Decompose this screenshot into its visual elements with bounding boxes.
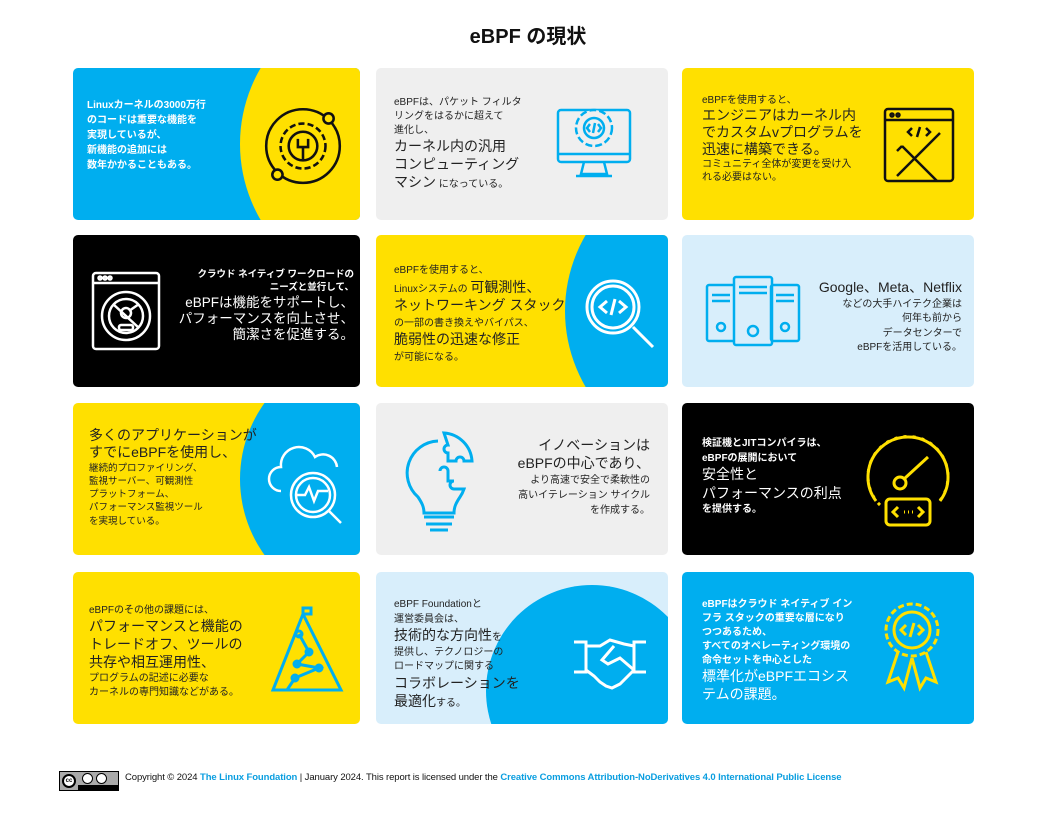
text: linux kernel: 数年かかることもある。 — [87, 160, 197, 171]
icon: award ribbon — [884, 602, 940, 692]
text: challenges: 共存や相互運用性、 — [89, 654, 215, 670]
panel: foundation — [376, 572, 668, 724]
panel: verifier JIT — [682, 403, 974, 555]
icon: gear wrench — [264, 108, 342, 184]
text: challenges: トレードオフ、ツールの — [89, 636, 242, 652]
text: general computing: eBPFは、パケット フィルタ — [394, 97, 522, 108]
text: innovation: イノベーションは — [538, 437, 650, 453]
text: observability: Linuxシステムの 可観測性、 — [394, 278, 540, 294]
text: cloud native: パフォーマンスを向上させ、 — [179, 311, 354, 326]
text: applications: すでにeBPFを使用し、 — [89, 444, 236, 460]
text: linux kernel: 実現しているが、 — [87, 130, 166, 141]
panel: applications — [73, 403, 360, 555]
text: big tech: データセンターで — [883, 328, 962, 338]
text: observability: eBPFを使用すると、 — [394, 265, 489, 276]
text: foundation: 技術的な方向性を — [394, 627, 502, 643]
text: observability: の一部の書き換えやバイパス、 — [394, 318, 534, 328]
text: general computing — [394, 96, 522, 190]
panel: cloud native — [73, 235, 360, 387]
icon: cc badge — [59, 771, 119, 791]
text: observability: 脆弱性の迅速な修正 — [394, 331, 520, 347]
text: applications: 継続的プロファイリング、 — [89, 463, 202, 474]
text: custom programs: エンジニアはカーネル内 — [702, 107, 856, 123]
panel: custom programs — [682, 68, 974, 220]
text: standardization: eBPFはクラウド ネイティブ イン — [702, 599, 852, 610]
text: standardization: つつあるため、 — [702, 627, 772, 638]
text: applications — [89, 427, 257, 527]
text: applications: 監視サーバー、可観測性 — [89, 476, 193, 487]
text: innovation: 高いイテレーション サイクル — [518, 490, 650, 501]
text: standardization — [702, 598, 852, 702]
text: cloud native: 簡潔さを促進する。 — [232, 327, 354, 342]
text: general computing: コンピューティング — [394, 156, 519, 172]
text: foundation: 最適化する。 — [394, 693, 466, 709]
text: general computing: 進化し、 — [394, 125, 434, 136]
text: cloud native: ニーズと並行して、 — [270, 282, 354, 293]
text: challenges: eBPFのその他の課題には、 — [89, 605, 214, 616]
text: custom programs: でカスタムvプログラムを — [702, 124, 863, 140]
text: custom programs: 迅速に構築できる。 — [702, 141, 828, 157]
text: applications: プラットフォーム、 — [89, 489, 174, 500]
text: observability: が可能になる。 — [394, 352, 464, 362]
text: foundation: コラボレーションを — [394, 674, 520, 690]
text: standardization: フラ スタックの重要な層になり — [702, 613, 845, 624]
text: challenges: パフォーマンスと機能の — [89, 618, 243, 634]
text: applications: を実現している。 — [89, 516, 165, 527]
text: linux kernel: のコードは重要な機能を — [87, 115, 197, 126]
icon: cloud magnifier — [268, 446, 342, 524]
text: big tech: などの大手ハイテク企業は — [842, 298, 962, 310]
text: foundation: ロードマップに関する — [394, 661, 494, 672]
text: verifier JIT: eBPFの展開において — [702, 452, 797, 464]
text: verifier JIT: パフォーマンスの利点 — [702, 484, 842, 500]
panel: big tech — [682, 235, 974, 387]
text: innovation: eBPFの中心であり、 — [518, 455, 650, 471]
text: general computing: カーネル内の汎用 — [394, 138, 506, 154]
text: standardization: 標準化がeBPFエコシス — [702, 668, 849, 684]
text: custom programs: コミュニティ全体が変更を受け入 — [702, 159, 851, 170]
text: big tech: Google、Meta、Netflix — [819, 279, 962, 295]
text: challenges: プログラムの記述に必要な — [89, 673, 209, 684]
text: custom programs: れる必要はない。 — [702, 172, 782, 183]
text: standardization: すべてのオペレーティング環境の — [702, 641, 850, 652]
text: verifier JIT: を提供する。 — [702, 504, 762, 515]
text: foundation: 提供し、テクノロジーの — [394, 646, 503, 658]
text: linux kernel: Linuxカーネルの3000万行 — [87, 100, 206, 111]
icon: servers — [706, 276, 800, 346]
icon: handshake — [574, 638, 646, 690]
icon: cc badge: cc — [66, 778, 72, 784]
panel: linux kernel — [73, 68, 360, 220]
icon: speedometer — [866, 435, 950, 526]
text: verifier JIT: 検証機とJITコンパイラは、 — [702, 438, 826, 449]
text: big tech — [819, 279, 962, 353]
text: innovation: より高速で安全で柔軟性の — [530, 475, 650, 486]
text: verifier JIT: 安全性と — [702, 466, 758, 482]
text: big tech: 何年も前から — [902, 313, 962, 324]
text: cloud native: クラウド ネイティブ ワークロードの — [197, 269, 354, 280]
footer: license — [59, 771, 842, 791]
text: custom programs — [702, 94, 863, 183]
text: innovation — [518, 437, 650, 516]
panel: innovation — [376, 403, 668, 555]
text: standardization: 命令セットを中心とした — [702, 655, 812, 666]
text: verifier JIT — [702, 437, 842, 515]
text: general computing: マシン になっている。 — [394, 174, 508, 190]
title: eBPF の現状 — [470, 26, 586, 48]
text: standardization: テムの課題。 — [702, 686, 786, 702]
text: foundation — [394, 598, 520, 709]
text: cloud native — [179, 268, 354, 342]
icon: mountain flag — [270, 606, 344, 692]
panel: challenges — [73, 572, 360, 724]
icon: lightbulb puzzle — [406, 431, 474, 532]
panel: general computing — [376, 68, 668, 220]
icon: window tools — [884, 108, 954, 182]
icon: monitor gear — [556, 108, 632, 178]
text: applications: パフォーマンス監視ツール — [89, 502, 203, 513]
text: copyright: Copyright © 2024 The Linux Foundation | January 2024. This report is licensed under the Creative Commons Attribution-NoDerivatives 4.0 International Public License — [125, 772, 841, 783]
panel: standardization — [682, 572, 974, 724]
text: innovation: を作成する。 — [590, 505, 650, 516]
text: general computing: リングをはるかに超えて — [394, 111, 504, 122]
text: challenges — [89, 604, 243, 698]
text: linux kernel: 新機能の追加には — [87, 145, 167, 156]
text: cloud native: eBPFは機能をサポートし、 — [185, 295, 354, 310]
text: foundation: eBPF Foundationと — [394, 599, 482, 610]
text: observability: ネットワーキング スタック — [394, 297, 565, 313]
text: linux kernel — [87, 99, 206, 171]
icon: window dial — [92, 272, 160, 350]
text: observability — [394, 264, 565, 362]
text: custom programs: eBPFを使用すると、 — [702, 95, 797, 106]
text: applications: 多くのアプリケーションが — [89, 427, 257, 443]
icon: magnifier code — [586, 280, 654, 348]
text: foundation: 運営委員会は、 — [394, 614, 464, 624]
text: big tech: eBPFを活用している。 — [857, 342, 962, 353]
text: challenges: カーネルの専門知識などがある。 — [89, 687, 239, 698]
panel: observability — [376, 235, 668, 387]
